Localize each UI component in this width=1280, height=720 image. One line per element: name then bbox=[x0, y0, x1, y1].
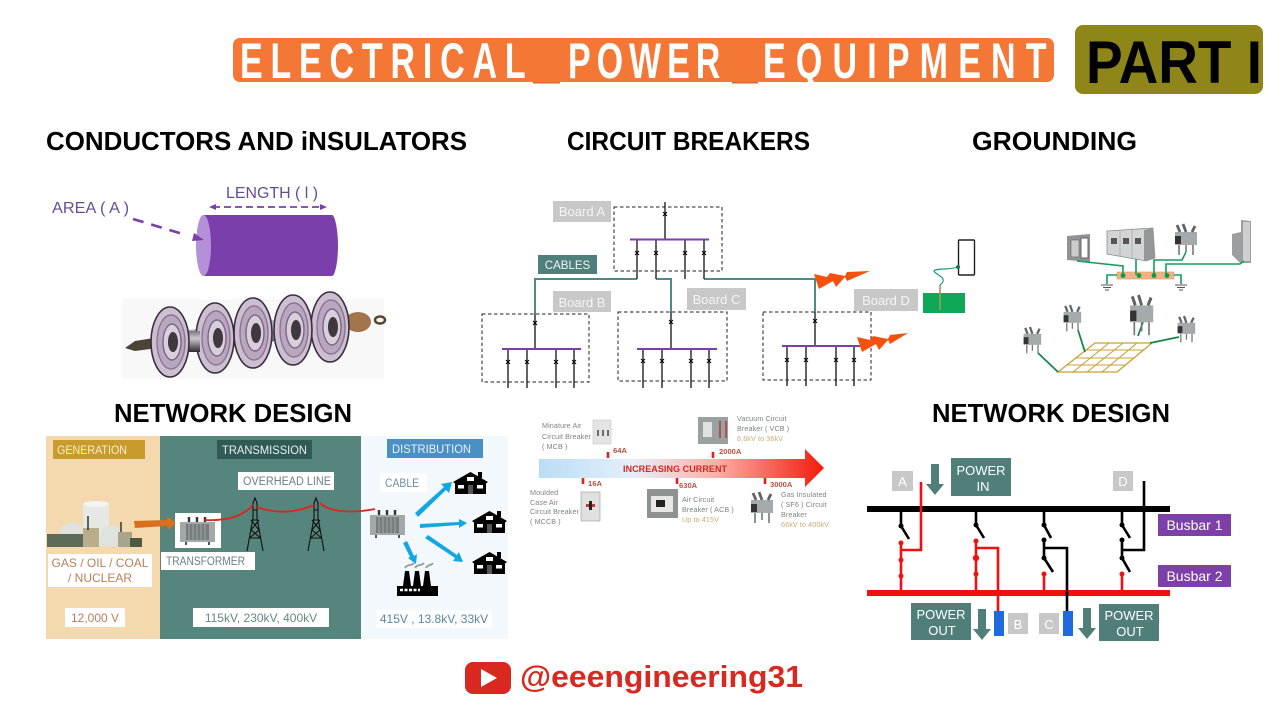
label: VCB: 6,6kV to 36kV bbox=[737, 434, 783, 443]
panel: network design generation transmission distribution bbox=[46, 436, 508, 639]
busbar 2 bbox=[867, 590, 1170, 596]
bay A bbox=[898, 482, 921, 593]
icon: towers bbox=[247, 498, 324, 551]
board A bbox=[614, 202, 722, 279]
label: SF6 bbox=[781, 490, 829, 529]
label: B bbox=[1008, 613, 1028, 634]
board C bbox=[618, 312, 727, 388]
grounding bar bbox=[1077, 252, 1244, 290]
icon: lightning fault 1 bbox=[814, 271, 870, 289]
earthing mesh bbox=[1038, 322, 1179, 372]
label: Board D: Board D bbox=[862, 293, 910, 308]
label: VCB: Vacuum Circuit bbox=[737, 414, 787, 423]
label: power in: POWER bbox=[956, 463, 1006, 478]
generation background bbox=[46, 436, 160, 639]
label: transmission voltage bbox=[193, 608, 329, 627]
icon: substation breakers bbox=[1024, 295, 1195, 353]
label: C bbox=[1039, 613, 1059, 634]
label: SF6: 66kV to 400kV bbox=[781, 520, 829, 529]
arrow: power in bbox=[926, 464, 944, 495]
icon: houses bbox=[453, 472, 507, 574]
heading: conductors and insulators: CONDUCTORS AND iNSULATORS bbox=[46, 126, 467, 156]
label: transmission: TRANSMISSION bbox=[222, 443, 307, 457]
label: generation: GENERATION bbox=[57, 443, 127, 457]
label: power in bbox=[951, 458, 1011, 496]
icon: MCCB bbox=[581, 492, 600, 521]
label: VCB: Breaker ( VCB ) bbox=[737, 424, 789, 433]
label: MCCB bbox=[530, 488, 580, 526]
arrow: power out right bbox=[1078, 608, 1096, 639]
transmission background bbox=[160, 436, 361, 639]
label: generation voltage: 12,000 V bbox=[71, 611, 119, 625]
chart: increasing current breaker scale bbox=[530, 414, 829, 529]
icon: factory bbox=[397, 563, 438, 596]
icon: length arrow bbox=[209, 204, 327, 210]
icon: power plant bbox=[47, 501, 142, 547]
label: cables bbox=[538, 255, 597, 274]
ticks and amp ratings: 630A bbox=[679, 481, 698, 490]
panel: glass insulator illustration bbox=[122, 292, 385, 379]
label: length: LENGTH ( l ) bbox=[226, 185, 318, 202]
heading: network design left: NETWORK DESIGN bbox=[114, 398, 352, 428]
distribution background bbox=[361, 436, 508, 639]
bay C bbox=[1042, 509, 1067, 612]
ticks and amp ratings: 2000A bbox=[719, 447, 742, 456]
gradient arrow bbox=[539, 449, 824, 487]
label: cables: CABLES bbox=[545, 260, 591, 272]
label: MCB: Minature Air bbox=[542, 421, 582, 430]
label: D bbox=[1113, 471, 1133, 491]
label: SF6: ( SF6 ) Circuit bbox=[781, 500, 827, 509]
label: MCCB: Moulded bbox=[530, 488, 558, 497]
label: A bbox=[892, 471, 913, 491]
label: MCB bbox=[542, 421, 592, 451]
label: MCB: Circuit Breaker bbox=[542, 432, 592, 441]
bay B bbox=[973, 509, 998, 612]
label: busbar 2 bbox=[1158, 565, 1231, 587]
label: ACB: Up to 415V bbox=[682, 515, 719, 524]
label: Board B: Board B bbox=[559, 295, 605, 310]
label: power out left bbox=[911, 603, 971, 640]
label: Board D bbox=[854, 289, 918, 311]
ticks and amp ratings: 64A bbox=[613, 446, 627, 455]
label: fuel sources: GAS / OIL / COAL bbox=[52, 556, 149, 570]
panel: double busbar diagram bbox=[867, 458, 1231, 641]
label: increasing current: INCREASING CURRENT bbox=[623, 464, 728, 474]
channel handle: @eeengineering31 bbox=[520, 659, 803, 694]
icon: ground rod and device bbox=[923, 240, 974, 313]
label: Board C: Board C bbox=[693, 292, 740, 307]
label: transmission bbox=[217, 440, 312, 459]
title banner bbox=[233, 34, 1054, 90]
ticks and amp ratings bbox=[583, 446, 793, 490]
label: fuel sources bbox=[48, 554, 152, 587]
red overhead line bbox=[205, 503, 375, 520]
label: cable: CABLE bbox=[385, 478, 419, 490]
label: C: C bbox=[1044, 617, 1054, 632]
label: ACB: Breaker ( ACB ) bbox=[682, 505, 734, 514]
label: overhead line: OVERHEAD LINE bbox=[243, 476, 331, 488]
label: power out left: OUT bbox=[928, 623, 956, 638]
label: overhead line bbox=[238, 472, 334, 490]
label: transformer bbox=[161, 552, 255, 570]
heading: grounding: GROUNDING bbox=[972, 126, 1137, 156]
title banner: POWER bbox=[568, 34, 720, 90]
icon: SF6 breaker bbox=[751, 492, 773, 523]
label: MCCB: ( MCCB ) bbox=[530, 517, 561, 526]
label: cable bbox=[380, 473, 427, 492]
arrow: power out left bbox=[973, 609, 991, 640]
icon: VCB bbox=[698, 417, 728, 444]
label: ACB: Air Circuit bbox=[682, 495, 714, 504]
label: VCB bbox=[737, 414, 789, 443]
panel: conductor cylinder bbox=[52, 185, 338, 276]
label: Board A: Board A bbox=[559, 204, 605, 219]
icon: transformer step up bbox=[175, 513, 221, 548]
label: MCCB: Circuit Breaker bbox=[530, 507, 580, 516]
label: A: A bbox=[898, 474, 907, 489]
title banner: EQUIPMENT bbox=[763, 34, 1047, 90]
label: generation bbox=[53, 440, 145, 459]
bay D bbox=[1120, 481, 1144, 593]
label: generation voltage bbox=[65, 608, 125, 627]
label: distribution bbox=[387, 439, 483, 458]
label: area: AREA ( A ) bbox=[52, 200, 129, 217]
label: transmission voltage: 115kV, 230kV, 400kV bbox=[205, 611, 317, 625]
label: Board B bbox=[553, 291, 611, 312]
label: ACB bbox=[682, 495, 734, 524]
label: Board C bbox=[687, 288, 746, 310]
cylinder bbox=[196, 215, 338, 276]
label: busbar 2: Busbar 2 bbox=[1166, 568, 1223, 584]
label: power out right: POWER bbox=[1104, 608, 1154, 623]
feeder block C bbox=[1063, 611, 1073, 636]
label: power out right bbox=[1099, 604, 1159, 641]
label: SF6: Breaker bbox=[781, 510, 807, 519]
title banner: ELECTRICAL bbox=[240, 34, 526, 90]
busbar 1 bbox=[867, 506, 1170, 512]
label: transformer: TRANSFORMER bbox=[166, 556, 245, 568]
label: distribution: DISTRIBUTION bbox=[392, 442, 471, 456]
cables bbox=[535, 279, 815, 314]
feeder block B bbox=[994, 611, 1004, 636]
heading: circuit breakers: CIRCUIT BREAKERS bbox=[567, 126, 810, 156]
icon: ACB bbox=[647, 489, 678, 518]
label: MCCB: Case Air bbox=[530, 498, 558, 507]
icon: transformer step down bbox=[370, 510, 405, 538]
label: MCB: ( MCB ) bbox=[542, 442, 567, 451]
label: SF6: Gas Insulated bbox=[781, 490, 827, 499]
icon: MCB bbox=[593, 420, 611, 444]
label: power out right: OUT bbox=[1116, 624, 1144, 639]
panel: circuit breaker board diagram bbox=[482, 201, 974, 388]
arrow: plant to transformer bbox=[134, 516, 176, 530]
label: busbar 1 bbox=[1158, 514, 1231, 536]
icon: area arrow bbox=[133, 219, 204, 241]
ticks and amp ratings: 3000A bbox=[770, 480, 793, 489]
label: power out left: POWER bbox=[916, 607, 966, 622]
arrows: distribution feeds bbox=[403, 482, 467, 564]
part badge: PART I bbox=[1086, 29, 1262, 96]
label: power in: IN bbox=[976, 479, 990, 494]
ticks and amp ratings: 16A bbox=[588, 479, 602, 488]
panel: grounding diagram bbox=[1024, 220, 1251, 372]
label: D: D bbox=[1118, 474, 1128, 489]
icon: equipment row bbox=[1067, 220, 1251, 263]
footer: youtube handle bbox=[465, 659, 803, 694]
icon: lightning fault 2 bbox=[857, 333, 908, 352]
label: Board A bbox=[553, 201, 611, 222]
board B bbox=[482, 314, 589, 388]
label: fuel sources: / NUCLEAR bbox=[68, 571, 132, 585]
icon: youtube bbox=[465, 662, 511, 694]
heading: network design right: NETWORK DESIGN bbox=[932, 398, 1170, 428]
label: distribution voltage: 415V , 13.8kV, 33kV bbox=[380, 612, 488, 626]
label: B: B bbox=[1014, 617, 1022, 632]
label: busbar 1: Busbar 1 bbox=[1166, 517, 1223, 533]
board D bbox=[763, 312, 871, 386]
